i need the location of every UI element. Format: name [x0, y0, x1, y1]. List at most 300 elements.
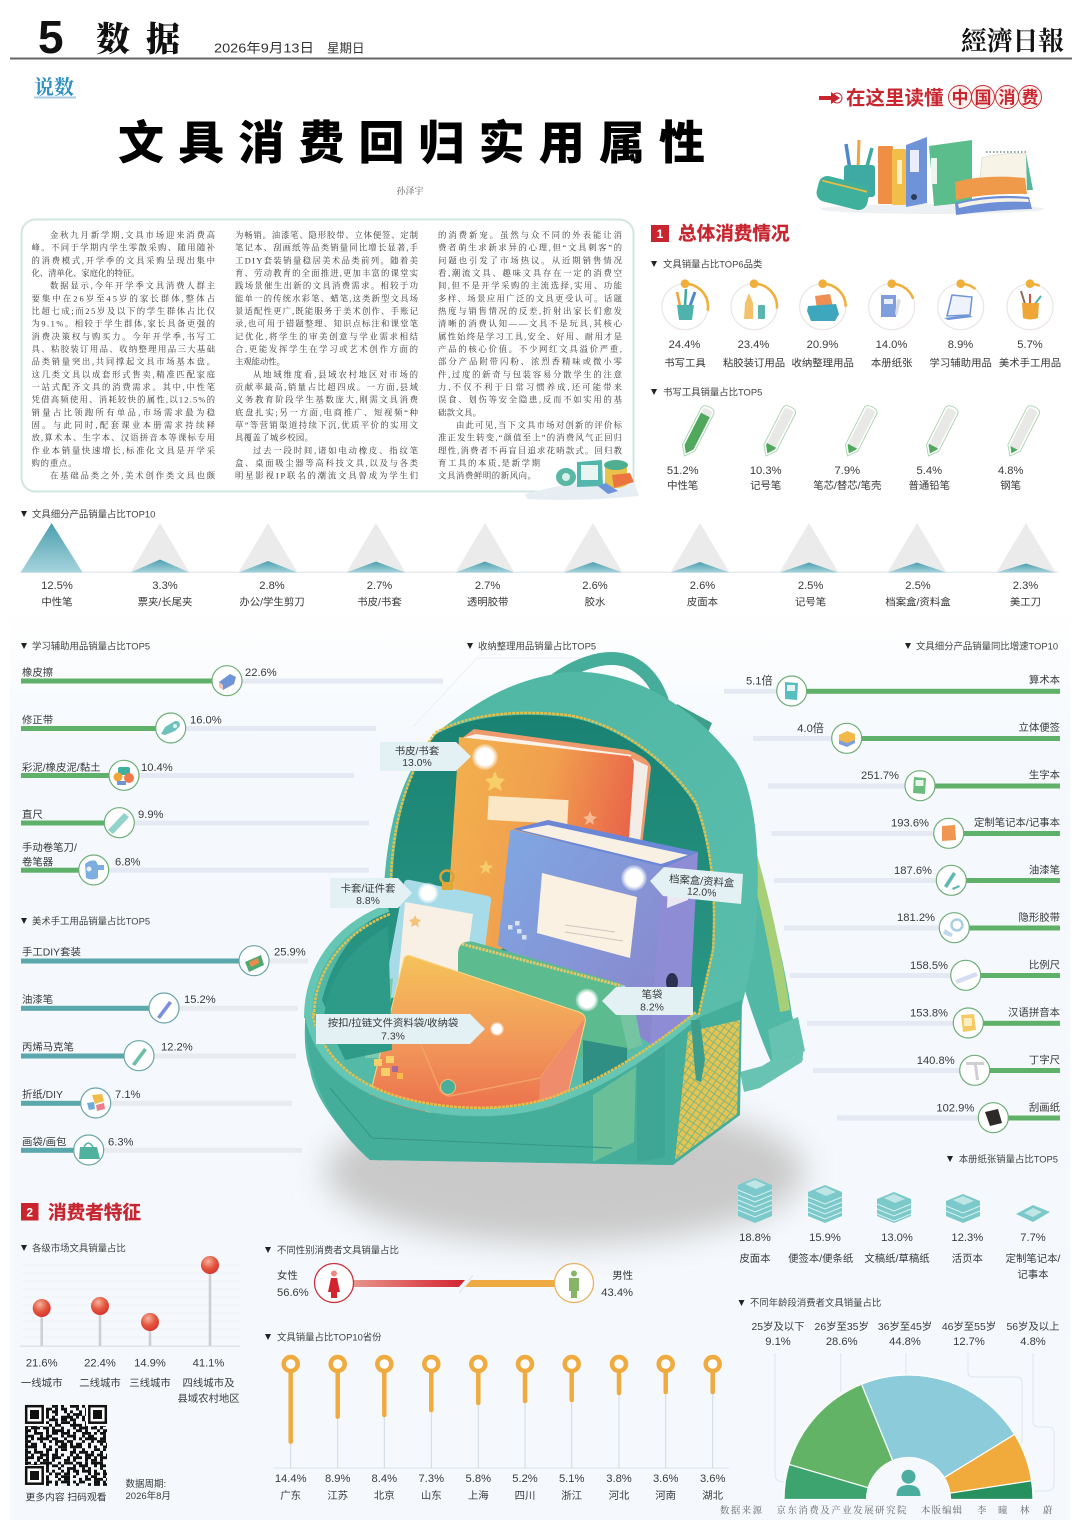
pin: tier 4 and rural: 四线城市及 — [183, 1376, 235, 1390]
article column 2: 主观能动性。 — [235, 357, 285, 367]
bar: markers: 记号笔 — [795, 596, 826, 608]
stack: custom notebook — [1006, 1205, 1061, 1281]
female: 女性 — [277, 1269, 298, 1282]
ring chart: TOP6 categories — [662, 279, 1061, 370]
callout: card holder — [330, 878, 438, 908]
pin: Zhejiang — [559, 1357, 585, 1502]
stack: custom notebook: 记事本 — [1017, 1268, 1049, 1281]
subheading: age groups: 不同年龄段消费者文具销量占比 — [750, 1297, 881, 1308]
pin: tier 3 — [129, 1313, 171, 1390]
article column 2 — [235, 230, 419, 481]
row: DIY kit: 手工DIY套装 — [22, 946, 81, 958]
category: glue and binding: 粘胶装订用品 — [723, 356, 785, 370]
row: 3D sticky notes: 4.0倍 — [797, 721, 824, 735]
pencil: refills — [813, 404, 881, 492]
row: ruler: 9.9% — [138, 809, 164, 821]
article column 3: 问题也引发了市场热议。从近期销售情况 — [438, 255, 623, 265]
orange book — [445, 729, 651, 960]
category: art and craft — [999, 279, 1061, 370]
pin: tier 1: 21.6% — [26, 1358, 58, 1370]
callout: file boxes: 12.0% — [687, 886, 717, 900]
pencil: regular pencil — [909, 404, 960, 492]
male — [554, 1264, 633, 1302]
category: storage: 收纳整理用品 — [792, 356, 854, 370]
article column 3: 础款文具。 — [438, 407, 481, 417]
backpack shell — [305, 672, 758, 1165]
article column 3: 由此可见,当下文具市场对创新的评价标 — [456, 420, 623, 430]
bar: utility knife: 2.3% — [1013, 580, 1038, 592]
article column 1: 消费决策权与购买力。今年开学季,书写工 — [32, 331, 216, 341]
article column 1: 购的重点。 — [32, 458, 76, 468]
row: arithmetic notebook — [724, 674, 1061, 706]
icon: person — [896, 1470, 920, 1496]
row: invisible tape: 隐形胶带 — [1018, 911, 1060, 924]
bar: scissors: 2.8% — [259, 580, 285, 592]
front pocket — [305, 908, 742, 1165]
stack: loose-leaf — [946, 1194, 983, 1265]
article column 3: 误食、划伤等安全隐患,反而不如实用的基 — [438, 395, 623, 405]
slice: 56 and over — [950, 1481, 1033, 1500]
row: origami: 折纸/DIY — [22, 1088, 63, 1101]
row: pencil sharpener: 手动卷笔刀/ — [22, 841, 77, 854]
row: clay: 10.4% — [141, 762, 173, 774]
pin: Sichuan — [512, 1357, 538, 1502]
pin: Zhejiang: 5.1% — [559, 1473, 585, 1485]
pin: Guangdong — [275, 1357, 307, 1502]
row: invisible tape: 181.2% — [897, 912, 935, 924]
row: scale ruler — [790, 958, 1060, 990]
bar: book covers: 书皮/书套 — [357, 596, 402, 608]
article column 2: 录,也可用于错题整理、知识点标注和课堂笔 — [235, 319, 419, 329]
pin: Beijing — [372, 1357, 397, 1502]
pencil: fountain pen — [998, 404, 1041, 492]
backpack shadow — [325, 1100, 805, 1244]
article column 2: 具覆盖了城乡校园。 — [235, 433, 313, 443]
bar chart: art supplies TOP5 — [21, 946, 308, 1165]
pencil: marker: 10.3% — [750, 465, 782, 477]
row: eraser: 橡皮擦 — [22, 666, 53, 679]
article column 3: 文具消费鲜明的新风向。 — [438, 471, 536, 481]
row: scratch paper: 102.9% — [936, 1102, 974, 1114]
callout: book covers — [380, 742, 498, 771]
pin: Sichuan: 5.2% — [512, 1473, 538, 1485]
pin: Henan: 河南 — [655, 1489, 676, 1502]
section heading: consumer traits: 2 — [26, 1206, 33, 1220]
pin: Guangdong: 广东 — [280, 1489, 301, 1502]
gender comparison chart — [277, 1264, 633, 1302]
row: invisible tape — [784, 911, 1060, 943]
article column 1: 比超七成;而25岁及以下的学生群体占比仅 — [32, 306, 216, 316]
pin: Beijing: 北京 — [374, 1489, 395, 1502]
article column 3: 的消费新宠。虽然与众不同的外表能让消 — [438, 230, 622, 240]
section heading: overall consumption: 1 — [657, 227, 664, 241]
footer credits: 李 — [977, 1504, 987, 1516]
subheading: writing tools TOP5: 书写工具销量占比TOP5 — [663, 386, 762, 398]
pin: tier 2 — [79, 1297, 121, 1390]
campaign slogan: 中 — [952, 88, 968, 108]
pin chart: provinces TOP10 — [273, 1357, 729, 1502]
campaign slogan: 费 — [1022, 88, 1038, 108]
row: ruler — [21, 808, 369, 838]
top handle — [543, 659, 667, 720]
article column 3: 费者萌生求新求异的心理,但“文具刺客”的 — [438, 243, 622, 253]
row: correction tape: 修正带 — [22, 714, 53, 726]
row: ruler: 直尺 — [22, 808, 43, 821]
article column 2: 底盘扎实;另一方面,电商推广、短视频“种 — [235, 407, 419, 417]
article column 2: 过去一段时间,诸如电动橡皮、指纹笔 — [253, 445, 419, 455]
card holder — [382, 870, 491, 1001]
pin: Zhejiang: 浙江 — [561, 1490, 582, 1502]
pin: tier 4 and rural: 41.1% — [193, 1358, 224, 1370]
row: clay: 彩泥/橡皮泥/黏土 — [22, 761, 101, 774]
pin: tier 3: 14.9% — [134, 1358, 166, 1370]
date line: 2026年9月13日 — [214, 40, 314, 56]
article column 1: 峰。不同于学期内学生零散采购、随用随补 — [32, 243, 216, 253]
bar chart: growth TOP10 — [724, 674, 1061, 1133]
female — [277, 1264, 354, 1302]
article column 1: 数据显示,今年开学季文具消费人群主 — [50, 281, 216, 291]
article column 2: 践场景催生出新的文具消费需求。相较于功 — [235, 281, 419, 291]
row: T-square: 丁字尺 — [1029, 1054, 1060, 1066]
article column 3: 理性,消费者不再盲目追求花哨款式。回归教 — [438, 445, 623, 455]
row: scratch paper: 刮画纸 — [1029, 1101, 1061, 1114]
row: scratch paper — [837, 1101, 1061, 1133]
row: paint marker — [774, 864, 1060, 895]
category: writing tools: 书写工具 — [664, 358, 706, 370]
half donut chart: age groups: 28.6% — [826, 1336, 858, 1348]
stack: leather notebook: 18.8% — [739, 1232, 771, 1244]
row: character practice book: 生字本 — [1029, 768, 1061, 782]
row: T-square — [813, 1054, 1060, 1085]
pin: Henan: 3.6% — [653, 1473, 679, 1485]
bar: book covers: 2.7% — [367, 580, 392, 592]
stack: draft paper — [864, 1192, 930, 1265]
mesh pocket — [675, 1020, 740, 1160]
article column 1: 一站式配齐文具的消费需求。其中,中性笔 — [32, 382, 216, 392]
category: notebooks and paper — [869, 279, 915, 370]
pin: Sichuan: 四川 — [515, 1490, 535, 1502]
green pencil pouch — [458, 942, 642, 1098]
subheading: storage TOP5: 收纳整理用品销量占比TOP5 — [478, 640, 596, 652]
pin: Jiangsu — [325, 1357, 351, 1502]
article column 3: 力,不仅不利于日常习惯养成,还可能带来 — [438, 382, 623, 392]
article column 1: 这几类文具以成套形式售卖,精准匹配家庭 — [32, 369, 216, 379]
author: 孙泽宇 — [396, 184, 424, 197]
male: 男性 — [612, 1269, 633, 1282]
subheading: products TOP10: 文具细分产品销量占比TOP10 — [32, 508, 155, 520]
callout: snap folder: 7.3% — [381, 1032, 405, 1042]
row: custom notebook: 定制笔记本/记事本 — [974, 816, 1061, 829]
pin: Guangdong: 14.4% — [275, 1473, 307, 1485]
orange envelope folder — [365, 955, 585, 1115]
campaign slogan: 消 — [998, 88, 1016, 108]
row: origami — [21, 1088, 292, 1118]
data period: 2026年8月 — [126, 1490, 171, 1502]
half donut chart: age groups: 4.8% — [1020, 1336, 1046, 1348]
article column 1: 作业本销量快速增长,标准化文具是开学采 — [32, 445, 216, 455]
callout: pencil case: 笔袋 — [642, 988, 663, 1001]
row: paint marker: 油漆笔 — [1029, 864, 1060, 876]
callout: file boxes: 档案盒/资料盒 — [669, 872, 735, 890]
row: arithmetic notebook: 5.1倍 — [746, 674, 773, 688]
pin: Jiangsu: 江苏 — [327, 1489, 348, 1502]
bar: leather notebooks: 皮面本 — [687, 596, 719, 608]
pencil: regular pencil: 5.4% — [917, 465, 942, 477]
row: clay — [21, 760, 354, 790]
section name: 数据 — [96, 21, 196, 59]
pin: tier 4 and rural — [177, 1256, 240, 1405]
footer credits: 曈 — [998, 1504, 1008, 1516]
bar: ticket clips — [130, 523, 192, 608]
category: art and craft: 美术手工用品 — [999, 356, 1061, 370]
pencil chart: writing tools TOP5 — [667, 404, 1041, 492]
bar chart: study aids TOP5 — [21, 666, 443, 885]
article column 2: 能单一的传统水彩笔、蜡笔,这类新型文具场 — [235, 293, 419, 303]
article column 3: 多样、场景应用广泛的文具更受认可。话题 — [438, 293, 623, 303]
row: custom notebook: 193.6% — [891, 818, 929, 830]
callout: pencil case: 8.2% — [640, 1002, 664, 1014]
row: pencil sharpener: 6.8% — [115, 856, 141, 868]
male: 43.4% — [601, 1287, 633, 1299]
slice: 46 to 55 — [944, 1434, 1032, 1493]
row: paint marker: 15.2% — [184, 994, 216, 1006]
blue binder — [498, 820, 698, 1045]
article column 1: 销量占比领跑所有单品,市场需求最为稳 — [32, 407, 216, 417]
footer credits: 京东消费及产业发展研究院 — [776, 1504, 907, 1516]
pin: Hubei — [700, 1357, 726, 1502]
pin: tier 1 — [21, 1299, 62, 1390]
article column 3: 件,过度的新奇与包装容易分散学生的注意 — [438, 369, 623, 379]
footer credits: 蔚 — [1043, 1504, 1053, 1516]
article column 3: 间,但不是开学采购的主流选择,实用、功能 — [438, 281, 622, 291]
callout: card holder: 卡套/证件套 — [341, 882, 396, 895]
row: 3D sticky notes — [753, 721, 1061, 753]
article column 2: 明星影视IP联名的潮流文具曾成为学生们 — [235, 471, 419, 481]
article column 1: 具、粘胶装订用品、收纳整理用品三大基础 — [32, 344, 216, 354]
category: storage: 20.9% — [807, 339, 838, 351]
row: DIY kit — [21, 946, 308, 976]
bar: gel pen: 12.5% — [41, 580, 73, 592]
stack: loose-leaf: 12.3% — [951, 1232, 983, 1244]
row: eraser: 22.6% — [245, 667, 277, 679]
article column 3 — [438, 230, 623, 481]
article column 3: 清晰的消费认知——文具不是玩具,其核心 — [438, 319, 623, 329]
callout: card holder: 8.8% — [356, 896, 380, 907]
pin: Hebei: 河北 — [609, 1490, 630, 1502]
article column 2: 笔记本、刮画纸等品类销量同比增长显著,手 — [235, 243, 419, 253]
category: notebooks and paper: 本册纸张 — [871, 356, 913, 370]
row: pencil sharpener — [21, 841, 369, 885]
bar: ticket clips: 票夹/长尾夹 — [138, 596, 192, 608]
bar: clear tape: 透明胶带 — [467, 596, 508, 608]
icon: desk stationery — [525, 460, 639, 500]
pencil: refills: 笔芯/替芯/笔壳 — [813, 479, 881, 492]
pencil: regular pencil: 普通铅笔 — [909, 479, 950, 492]
subheading: gender: 不同性别消费者文具销量占比 — [277, 1244, 399, 1256]
row: paint marker — [21, 993, 298, 1023]
bar: gel pen — [21, 523, 83, 608]
article column 1: 在基础品类之外,美术创作类文具也颇 — [50, 471, 216, 481]
article column 1: 要集中在26岁至45岁的家长群体,整体占 — [32, 293, 215, 303]
pin: Shandong — [419, 1357, 444, 1502]
callout: snap folder — [316, 1014, 504, 1044]
subheading: provinces: 文具销量占比TOP10省份 — [277, 1332, 382, 1342]
title: 文具消费回归实用属性 — [118, 107, 705, 173]
right shoulder strap — [727, 840, 805, 1092]
category: writing tools — [662, 279, 708, 370]
row: character practice book — [768, 768, 1061, 801]
half donut chart: age groups: 56岁及以上 — [1006, 1320, 1060, 1333]
article column 1: 品类销量突出,共同撑起文具市场基本盘。 — [32, 357, 215, 367]
article column 2: 贡献率最高,销量占比超四成。一方面,县域 — [235, 382, 419, 392]
stack: custom notebook: 定制笔记本/ — [1006, 1252, 1061, 1265]
bar: gel pen: 中性笔 — [41, 596, 73, 608]
row: pinyin notebook: 汉语拼音本 — [1008, 1006, 1061, 1019]
section heading: overall consumption: 总体消费情况 — [678, 223, 790, 244]
footer credits — [720, 1504, 1053, 1516]
lollipop chart: city tiers — [20, 1256, 240, 1405]
bar: markers — [780, 523, 838, 608]
row: drawing bag — [21, 1135, 302, 1165]
footer credits: 林 — [1020, 1504, 1030, 1516]
row: arithmetic notebook: 算术本 — [1029, 674, 1061, 686]
slice: 25 and under — [784, 1464, 868, 1500]
article column 3: 部分产品附带闪粉、浓烈香精味或微小零 — [438, 357, 623, 367]
pin: tier 4 and rural: 县域农村地区 — [177, 1392, 240, 1405]
category: writing tools: 24.4% — [669, 339, 700, 351]
QR code — [25, 1405, 107, 1486]
bar: file boxes: 2.5% — [905, 580, 931, 592]
half donut chart: age groups: 25岁及以下 — [751, 1320, 805, 1333]
bar: markers: 2.5% — [798, 580, 823, 592]
article column 1: 化、清单化、家庭化的特征。 — [32, 268, 140, 278]
pencil: refills: 7.9% — [835, 465, 860, 477]
article column 1: 固。与此同时,配套课业本册需求持续释 — [32, 420, 216, 430]
bar: scissors — [238, 523, 305, 608]
row: pinyin notebook — [807, 1006, 1061, 1038]
article column 2: 草”等营销渠道持续下沉,优质平价的实用文 — [235, 420, 419, 430]
bar: file boxes: 档案盒/资料盒 — [885, 596, 951, 608]
backpack interior — [322, 715, 713, 1050]
category: study aids: 学习辅助用品 — [930, 356, 992, 370]
half donut chart: age groups: 12.7% — [953, 1336, 985, 1348]
category: study aids — [930, 279, 992, 370]
footer credits: 数据来源 — [720, 1504, 763, 1516]
data period — [126, 1478, 171, 1502]
pin: tier 1: 一线城市 — [21, 1376, 62, 1390]
bar: utility knife: 美工刀 — [1010, 596, 1041, 608]
article column 3: 产品的核心价值。不少网红文具溢价严重, — [438, 344, 622, 354]
bar: book covers — [346, 523, 406, 608]
newspaper logo: 經濟日報 — [961, 21, 1064, 58]
pin: Shandong: 山东 — [421, 1489, 442, 1502]
article column 2: 记优化,将学生的审美创意与学业需求相结 — [235, 331, 419, 341]
footer credits: 本版编辑 — [921, 1504, 963, 1516]
icon: stationery illustration — [815, 137, 1044, 215]
article column 3: 热度与销售情况的反差,折射出家长们愈发 — [438, 306, 623, 316]
bar: ticket clips: 3.3% — [152, 580, 178, 592]
section heading: consumer traits: 消费者特征 — [48, 1202, 141, 1223]
article column 3: 准正发生转变,“颜值至上”的消费风气正回归 — [438, 433, 622, 443]
strap anchor — [672, 704, 712, 737]
bar: glue — [564, 523, 622, 608]
article column 1 — [32, 230, 216, 481]
subheading: TOP6 categories: 文具销量占比TOP6品类 — [663, 258, 763, 270]
pencil: fountain pen: 钢笔 — [1000, 479, 1021, 492]
row: scale ruler: 158.5% — [910, 960, 948, 972]
half donut chart: age groups: 46岁至55岁 — [942, 1320, 996, 1333]
bar: file boxes — [885, 523, 951, 608]
row: correction tape — [21, 713, 376, 743]
row: DIY kit: 25.9% — [274, 946, 306, 958]
campaign slogan — [819, 86, 1042, 110]
pin: tier 3: 三线城市 — [129, 1376, 171, 1390]
pin: Shandong: 7.3% — [419, 1473, 444, 1485]
row: scale ruler: 比例尺 — [1029, 958, 1060, 972]
article column 1: 放,算术本、生字本、汉语拼音本等课标专用 — [32, 433, 215, 443]
article column 3: 看,潮流文具、趣味文具存在一定的消费空 — [438, 268, 623, 278]
bar: leather notebooks — [670, 523, 730, 608]
article column 3: 育工具的本质,是新学期 — [438, 458, 541, 468]
category: study aids: 8.9% — [948, 339, 973, 351]
pencil: gel pen — [667, 404, 716, 492]
article column 2: 合,更能发挥学生在学习或艺术创作方面的 — [235, 344, 418, 354]
pin: Beijing: 8.4% — [372, 1473, 397, 1485]
pin: Hubei: 湖北 — [702, 1490, 724, 1502]
category: glue and binding — [723, 279, 785, 370]
category: storage — [792, 279, 854, 370]
callout: pencil case — [576, 987, 693, 1015]
article column 2: 景适配性更广,既能服务于美术创作、手账记 — [235, 306, 419, 316]
row: paint marker: 187.6% — [894, 865, 932, 877]
pencil: marker — [750, 404, 797, 492]
row: eraser — [21, 666, 443, 696]
slice: 26 to 35 — [789, 1384, 893, 1488]
stack chart: notebooks TOP5 — [738, 1178, 1061, 1281]
campaign slogan: 国 — [974, 88, 992, 108]
bar: clear tape: 2.7% — [475, 580, 500, 592]
category: notebooks and paper: 14.0% — [876, 339, 907, 351]
article column 2: 为畅销。油漆笔、隐形胶带、立体便签、定制 — [235, 230, 418, 240]
pin: Henan — [653, 1357, 679, 1502]
stack: leather notebook — [738, 1178, 772, 1265]
subheading: city tiers: 各级市场文具销量占比 — [32, 1242, 126, 1254]
stack: custom notebook: 7.7% — [1020, 1232, 1046, 1244]
article column 1: 凭借高频使用、消耗较快的属性,以12.5%的 — [32, 395, 215, 405]
triangle chart: products TOP10 — [20, 523, 1058, 608]
article column 1: 的消费模式,开学季的文具采购呈现出集中 — [32, 255, 215, 265]
row: correction tape: 16.0% — [190, 714, 222, 726]
stack: sticky note pad: 15.9% — [809, 1232, 841, 1244]
weekday: 星期日 — [327, 42, 365, 56]
page number: 5 — [38, 11, 64, 63]
row: pinyin notebook: 153.8% — [910, 1008, 948, 1020]
pin: tier 2: 22.4% — [84, 1358, 116, 1370]
pencil: gel pen: 中性笔 — [667, 479, 698, 492]
subheading: growth TOP10: 文具细分产品销量同比增速TOP10 — [916, 640, 1058, 652]
slice: 36 to 45 — [862, 1375, 1015, 1478]
category: art and craft: 5.7% — [1017, 339, 1043, 351]
panel: article — [22, 220, 639, 500]
row: paint marker: 油漆笔 — [22, 993, 53, 1006]
subheading: study aids TOP5: 学习辅助用品销量占比TOP5 — [32, 640, 150, 652]
bar: scissors: 办公/学生剪刀 — [239, 596, 305, 608]
pencil: fountain pen: 4.8% — [998, 465, 1024, 477]
half donut chart: age groups: 26岁至35岁 — [815, 1320, 869, 1333]
pin: Shanghai: 上海 — [468, 1489, 489, 1502]
half donut chart: age groups: 9.1% — [765, 1336, 791, 1348]
half donut chart: age groups — [751, 1320, 1060, 1500]
